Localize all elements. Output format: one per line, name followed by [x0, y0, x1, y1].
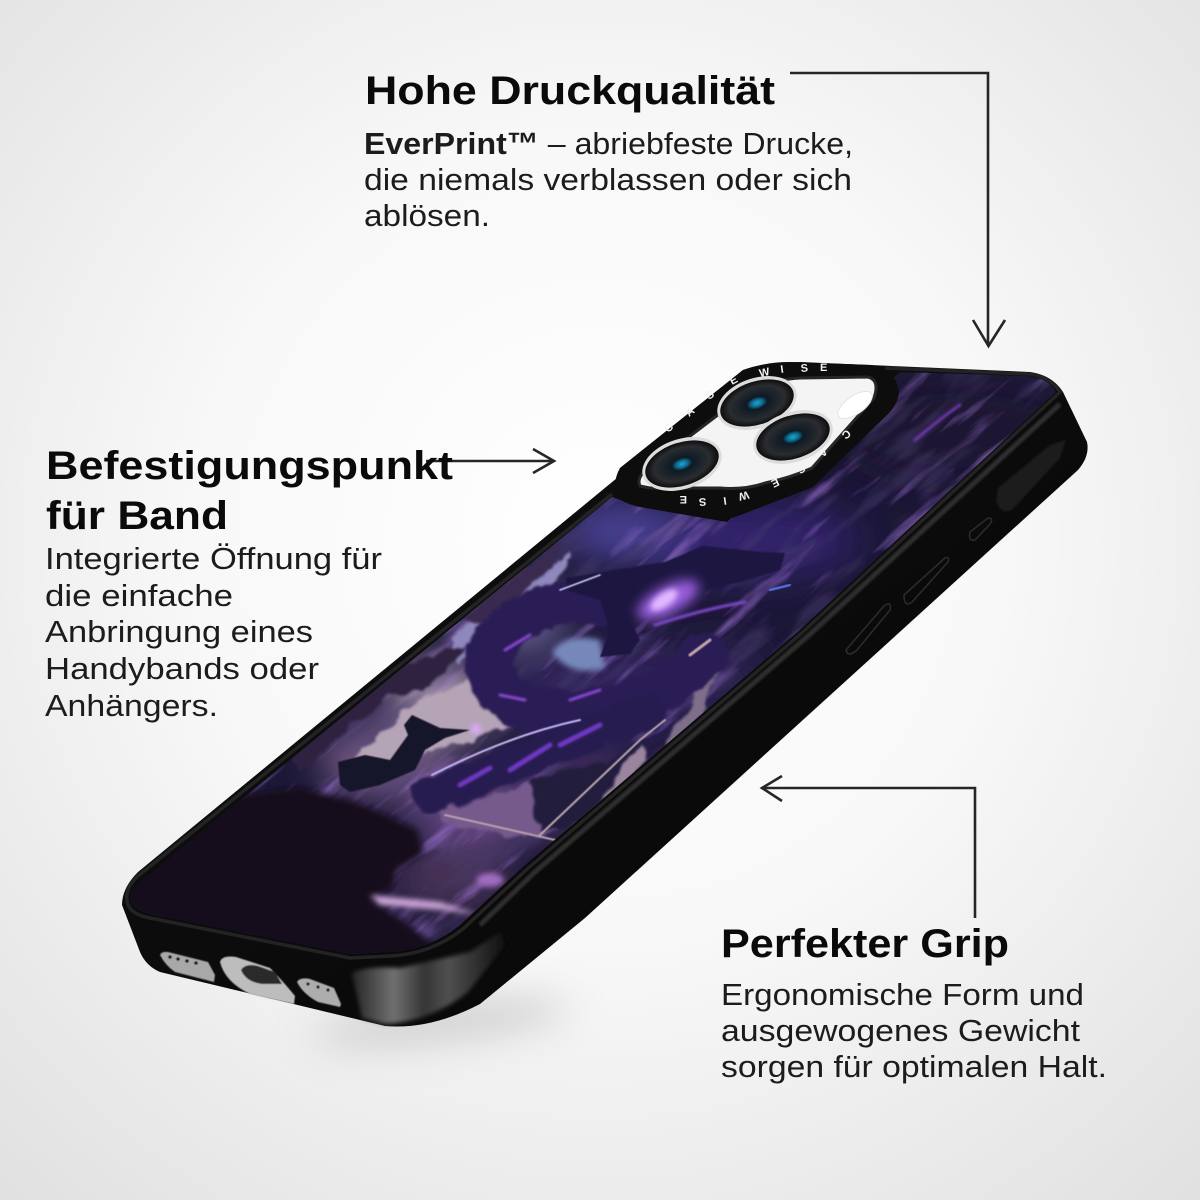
description: Anhängers.: [45, 688, 218, 723]
heading: Hohe Druckqualität: [365, 69, 775, 113]
ring brand text lower: CASEWISE: [680, 427, 853, 507]
description: Handybands oder: [45, 651, 319, 686]
arrow: top: [790, 73, 1005, 346]
description: EverPrint™ – abriebfeste Drucke,: [364, 126, 853, 161]
description: die niemals verblassen oder sich: [364, 162, 852, 197]
strap opening: [996, 440, 1066, 511]
description: sorgen für optimalen Halt.: [721, 1049, 1107, 1084]
description: Integrierte Öffnung für: [45, 541, 382, 576]
heading: für Band: [46, 494, 228, 538]
side buttons: [846, 518, 992, 654]
lower right pillars: [445, 640, 710, 840]
artwork glows: [302, 426, 1020, 925]
staff glow: [471, 724, 481, 734]
charging port: [220, 957, 295, 1004]
text block: Befestigungspunkt: [45, 444, 453, 723]
pink ground light: [370, 873, 504, 915]
flash: [833, 386, 877, 424]
description: [721, 977, 1107, 1084]
rim light edge: [480, 404, 1060, 925]
camera ring: [615, 362, 899, 520]
bottom corner highlight: [352, 932, 505, 1024]
heading: Perfekter Grip: [721, 922, 1009, 966]
phone case: [122, 362, 1088, 1027]
arrow: left: [426, 449, 554, 473]
camera module: [615, 362, 899, 520]
camera window: [639, 377, 876, 488]
heading: Befestigungspunkt: [46, 444, 453, 488]
dragon wing glow: [631, 572, 705, 628]
speaker left: [160, 952, 215, 982]
dark towers: [290, 545, 640, 835]
artwork: [130, 372, 1056, 954]
speaker right: [297, 978, 341, 1007]
case rim: [127, 368, 1060, 958]
pale sky shards: [350, 555, 722, 850]
description: Ergonomische Form und: [721, 977, 1084, 1012]
description: [45, 541, 382, 723]
sorceress silhouette: [338, 715, 470, 792]
dragon head and neck: [566, 546, 785, 657]
heading: [46, 444, 453, 538]
dragon body: [428, 601, 705, 795]
lens top: [710, 367, 804, 439]
case body silhouette: [122, 362, 1088, 1027]
description: Anbringung eines: [45, 614, 313, 649]
description: die einfache: [45, 578, 233, 613]
nebula streak texture: [130, 372, 1050, 954]
lens left: [635, 428, 729, 500]
description: [364, 126, 853, 233]
phone shadow: [309, 991, 571, 1053]
text block: Perfekter Grip: [721, 922, 1107, 1084]
dark foreground rock: [130, 784, 434, 954]
text block: Hohe Druckqualität: [364, 69, 853, 233]
ring brand text upper: CASEWISE: [662, 362, 827, 435]
lens right: [746, 401, 840, 473]
description: ablösen.: [364, 198, 490, 233]
dragon coil opening: [552, 638, 605, 671]
arrow: bottom: [762, 776, 975, 918]
description: ausgewogenes Gewicht: [721, 1013, 1080, 1048]
dragon glowing scales: [432, 405, 960, 785]
